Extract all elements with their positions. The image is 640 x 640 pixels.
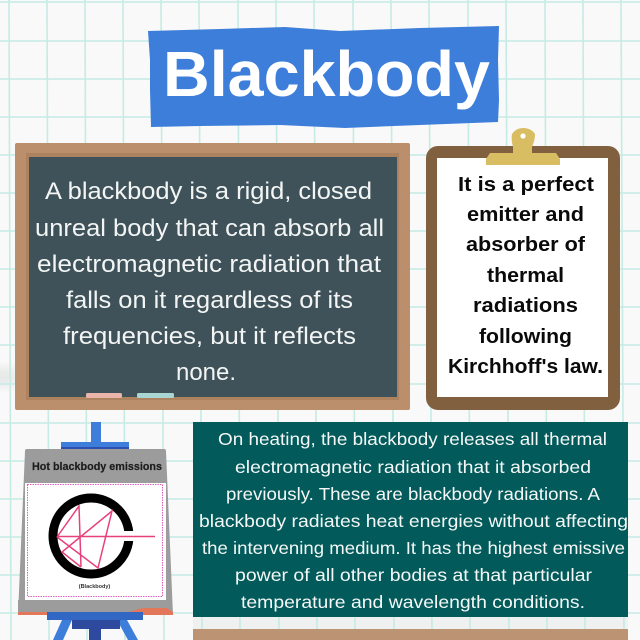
emissions heading: Hot blackbody emissions [32, 461, 162, 473]
chalkboard text: frequencies, but it reflects [63, 323, 356, 350]
panel: clipboard [426, 128, 620, 410]
chalkboard text: none. [176, 359, 236, 386]
chalkboard text [35, 178, 384, 386]
easel legs [53, 620, 138, 640]
explanation text: On heating, the blackbody releases all thermal [218, 429, 607, 449]
title banner [148, 26, 499, 128]
chalk: blue [137, 393, 174, 398]
diagram caption: (Blackbody) [79, 584, 110, 590]
clipboard text: It is a perfect [458, 173, 594, 196]
chalkboard text: falls on it regardless of its [66, 287, 353, 314]
explanation text: blackbody radiates heat energies without affecting [199, 511, 628, 531]
explanation text [199, 429, 628, 612]
explanation text: previously. These are blackbody radiations. A [226, 484, 600, 504]
chalkboard text: A blackbody is a rigid, closed [45, 178, 372, 205]
diagram card [25, 483, 166, 600]
icon: clipboard clip [486, 128, 560, 165]
explanation text: power of all other bodies at that particular [235, 565, 592, 585]
panel: teal explanation [193, 422, 628, 617]
panel: bottom tan strip [193, 629, 628, 640]
panel: chalkboard definition [15, 143, 410, 410]
clipboard text: Kirchhoff's law. [448, 355, 603, 378]
clipboard text [448, 173, 603, 378]
panel: easel with diagram [18, 422, 173, 640]
clipboard text: thermal [487, 264, 564, 287]
title text: Blackbody [163, 38, 490, 110]
explanation text: temperature and wavelength conditions. [241, 592, 585, 612]
clipboard text: radiations [473, 294, 578, 317]
chalkboard text: electromagnetic radiation that [37, 251, 381, 278]
chalkboard text: unreal body that can absorb all [35, 215, 384, 242]
easel canvas [18, 449, 173, 615]
clipboard text: emitter and [467, 203, 584, 226]
clipboard text: following [479, 325, 572, 348]
explanation text: electromagnetic radiation that it absorbed [235, 457, 591, 477]
blackbody cavity diagram [53, 498, 155, 574]
easel top post [91, 422, 101, 446]
explanation text: the intervening medium. It has the highest emissive [202, 538, 625, 558]
clipboard text: absorber of [466, 233, 585, 256]
chalk: pink [86, 393, 122, 398]
